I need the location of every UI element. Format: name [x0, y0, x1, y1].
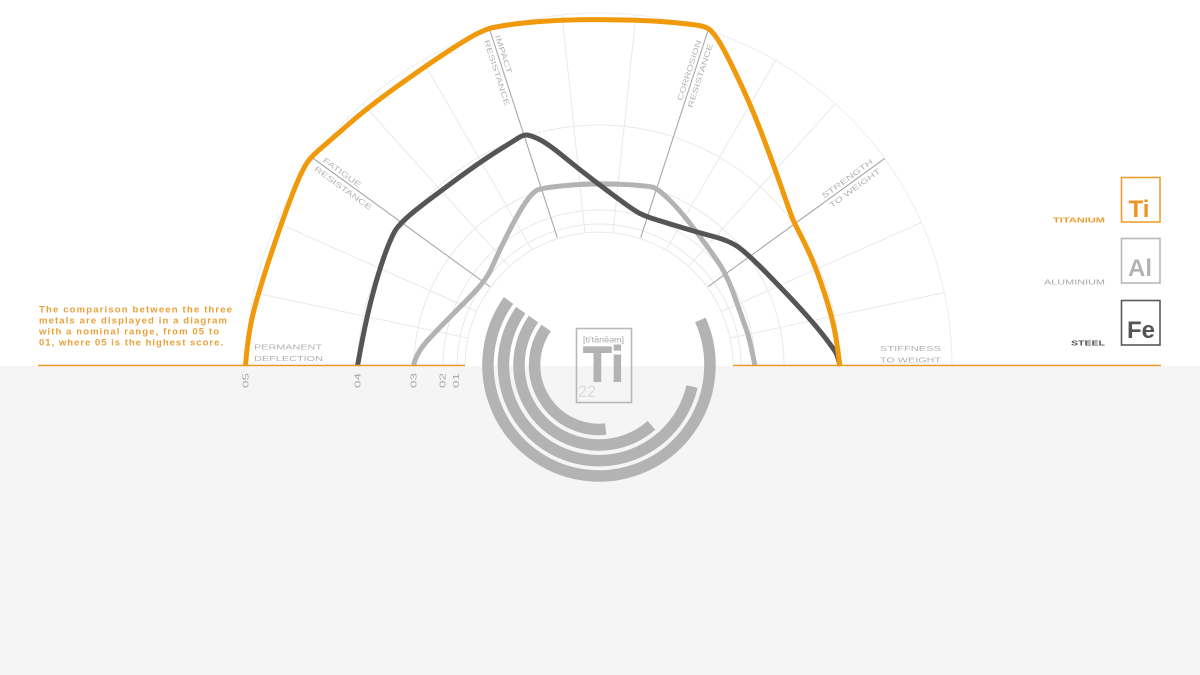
label: stiffness to weight: [880, 344, 942, 364]
explanatory text: with a nominal range, from 05 to: [38, 326, 219, 338]
label: fatigue resistance: [313, 155, 381, 212]
explanatory text: The comparison between the three: [39, 304, 232, 316]
lower background band: [0, 366, 1200, 675]
baseline right: [733, 365, 1161, 366]
titanium element tile: 22: [578, 382, 596, 401]
legend: aluminium: ALUMINIUM: [1044, 278, 1105, 286]
aluminium curve: [414, 184, 755, 366]
titanium element tile: [576, 328, 632, 402]
concentric score rings: [488, 300, 710, 476]
scale numbers: 01: [452, 372, 461, 388]
legend: titanium: TITANIUM: [1053, 216, 1105, 224]
label: permanent deflection: [254, 342, 323, 363]
legend: titanium: Ti: [1129, 196, 1149, 223]
label: permanent deflection: PERMANENT: [254, 342, 323, 352]
scale numbers: 04: [354, 372, 362, 388]
label: strength to weight: TO WEIGHT: [828, 166, 883, 210]
legend: titanium: [1053, 178, 1160, 224]
legend: aluminium: [1044, 238, 1160, 286]
explanatory text: metals are displayed in a diagram: [39, 316, 227, 326]
label: stiffness to weight: TO WEIGHT: [880, 356, 942, 364]
label: corrosion resistance: RESISTANCE: [686, 42, 715, 109]
label: corrosion resistance: [674, 39, 715, 109]
explanatory text: [38, 304, 232, 348]
ring 3: [519, 319, 652, 445]
scale numbers: [242, 372, 461, 388]
scale numbers: 05: [242, 372, 250, 388]
titanium element tile: [ti'tānēəm]: [583, 336, 624, 344]
label: corrosion resistance: CORROSION: [675, 39, 703, 102]
main axes: [313, 30, 885, 287]
radar grid: [246, 13, 952, 366]
legend: steel: Fe: [1127, 317, 1155, 344]
label: fatigue resistance: RESISTANCE: [313, 164, 374, 212]
ring 4: [535, 328, 606, 429]
scale numbers: 03: [410, 372, 418, 388]
label: impact resistance: IMPACT: [493, 34, 514, 75]
titanium element tile: Ti: [583, 336, 624, 392]
label: strength to weight: [820, 157, 883, 210]
label: permanent deflection: DEFLECTION: [254, 354, 323, 363]
ring 1: [488, 300, 710, 476]
legend: steel: [1071, 300, 1160, 348]
label: impact resistance: RESISTANCE: [482, 39, 512, 107]
legend: aluminium: Al: [1128, 255, 1152, 282]
label: stiffness to weight: STIFFNESS: [880, 344, 941, 353]
baseline left: [38, 365, 465, 366]
scale numbers: 02: [438, 372, 448, 388]
label: impact resistance: [482, 34, 523, 107]
ring 2: [503, 310, 692, 461]
legend: steel: STEEL: [1071, 338, 1106, 348]
label: strength to weight: STRENGTH: [820, 157, 875, 200]
label: fatigue resistance: FATIGUE: [321, 156, 363, 189]
explanatory text: 01, where 05 is the highest score.: [39, 338, 223, 348]
steel curve: [358, 135, 840, 366]
titanium curve: [246, 20, 840, 366]
